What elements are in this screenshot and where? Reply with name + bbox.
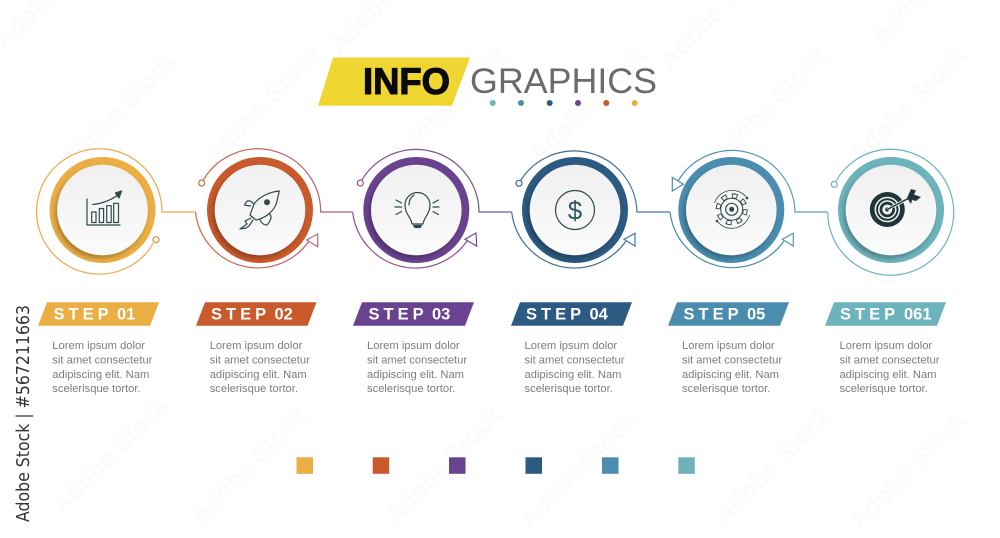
- label: step 3: 03: [432, 306, 450, 324]
- arrow: step 2: [307, 234, 318, 247]
- text block: step 6: adipiscing elit. Nam: [840, 369, 937, 381]
- step 6 label and text: [825, 302, 946, 395]
- watermark pattern: Adobe Stock: [844, 41, 972, 169]
- title word: GRAPHICS: GRAPHICS: [470, 62, 657, 101]
- line: step 4 lower arc: [512, 212, 626, 268]
- connecting lines and arcs: [37, 149, 954, 275]
- arrow: step 3: [465, 233, 477, 246]
- line: step 1 arc: [37, 149, 196, 274]
- watermark pattern: Adobe Stock: [46, 391, 174, 519]
- panel: step 2 disc: [207, 157, 313, 263]
- label: step 1: [38, 302, 159, 326]
- arrow: step 4: [624, 233, 635, 246]
- text block: step 1: scelerisque tortor.: [52, 383, 141, 395]
- text block: step 1: Lorem ipsum dolor: [52, 340, 145, 352]
- text block: step 5: adipiscing elit. Nam: [682, 369, 779, 381]
- text block: step 4: scelerisque tortor.: [524, 383, 613, 395]
- text block: step 6: Lorem ipsum dolor: [840, 340, 932, 352]
- watermark pattern: Adobe Stock: [184, 401, 312, 529]
- label: step 2: [196, 302, 316, 326]
- watermark pattern: Adobe Stock: [379, 401, 507, 529]
- step 1 label and text: [38, 302, 159, 395]
- watermark pattern: Adobe Stock: [524, 41, 652, 169]
- label: step 3: STEP: [368, 306, 428, 324]
- label: step 6: [825, 302, 946, 326]
- label: step 1: 01: [117, 306, 135, 324]
- dot: step 6: [831, 181, 837, 187]
- text block: step 4: Lorem ipsum dolor: [524, 340, 617, 352]
- text block: step 4: sit amet consectetur: [524, 354, 625, 366]
- label: step 2: 02: [274, 306, 293, 324]
- title colour dots: [490, 100, 638, 106]
- text block: step 6: sit amet consectetur: [840, 354, 940, 366]
- title banner: [318, 58, 470, 106]
- watermark pattern: Adobe Stock: [199, 41, 327, 169]
- label: step 4: 04: [590, 306, 609, 324]
- label: step 5: 05: [747, 306, 765, 324]
- text block: step 2: Lorem ipsum dolor: [210, 340, 303, 352]
- dot: step 3: [357, 180, 363, 186]
- dot: step 1: [153, 237, 159, 243]
- label: step 6: 061: [904, 306, 932, 324]
- step 2 label and text: [196, 302, 316, 395]
- icon: gear with cycle arrows: [714, 190, 750, 228]
- panel: step 3 disc: [363, 157, 469, 263]
- line: step 2 upper arc: [202, 149, 353, 212]
- text block: step 4: adipiscing elit. Nam: [524, 369, 622, 381]
- watermark pattern: Adobe Stock: [384, 41, 512, 169]
- text block: step 6: scelerisque tortor.: [840, 383, 928, 395]
- line: step 4 upper arc: [519, 151, 670, 212]
- line: step 3 upper arc: [360, 149, 512, 212]
- text block: step 5: scelerisque tortor.: [682, 383, 770, 395]
- text block: step 5: sit amet consectetur: [682, 354, 782, 366]
- panel: step 4 disc: [522, 157, 628, 263]
- step 5 label and text: [668, 302, 789, 395]
- title: [318, 58, 657, 106]
- text block: step 3: Lorem ipsum dolor: [367, 340, 460, 352]
- panel: step 5 disc: [678, 157, 784, 263]
- text block: step 5: Lorem ipsum dolor: [682, 340, 775, 352]
- watermark pattern: Adobe Stock: [514, 406, 642, 534]
- line: step 2 lower arc: [196, 212, 309, 268]
- dot: step 2: [199, 180, 205, 186]
- vertical stock credit: Adobe Stock | #567211663: [13, 305, 34, 522]
- text block: step 1: adipiscing elit. Nam: [52, 369, 149, 381]
- step 3 label and text: [353, 302, 474, 395]
- panel: step 6 disc: [838, 157, 944, 263]
- icon: growth chart: [87, 191, 122, 225]
- text block: step 1: sit amet consectetur: [52, 354, 153, 366]
- watermark pattern: Adobe Stock: [704, 41, 832, 169]
- panel: step 1 disc: [50, 157, 156, 263]
- line: step 5 upper arc: [678, 150, 828, 212]
- label: step 3: [353, 302, 474, 326]
- watermark pattern: Adobe Stock: [844, 406, 972, 534]
- icon: target with arrow: [870, 189, 921, 227]
- line: step 6 arc: [828, 149, 954, 275]
- text block: step 2: scelerisque tortor.: [210, 383, 298, 395]
- label: step 4: [511, 302, 632, 326]
- icon: rocket: [240, 191, 279, 229]
- title word: INFO: INFO: [363, 61, 450, 102]
- label: step 1: STEP: [54, 306, 113, 324]
- line: step 5 lower arc: [670, 212, 784, 268]
- text block: step 3: scelerisque tortor.: [367, 383, 455, 395]
- text block: step 3: adipiscing elit. Nam: [367, 369, 464, 381]
- arrow: step 5 upper: [672, 177, 683, 191]
- label: step 2: STEP: [211, 306, 270, 324]
- watermark pattern: Adobe Stock: [709, 401, 837, 529]
- line: step 3 lower arc: [353, 212, 467, 268]
- label: step 4: STEP: [526, 306, 585, 324]
- label: step 5: STEP: [684, 306, 743, 324]
- label: step 5: [668, 302, 789, 326]
- text block: step 2: sit amet consectetur: [210, 354, 310, 366]
- arrow: step 5 lower: [782, 233, 793, 246]
- colour legend squares: [296, 457, 695, 474]
- icon: dollar coin: $: [568, 196, 583, 226]
- icon: light bulb: [395, 192, 439, 228]
- text block: step 3: sit amet consectetur: [367, 354, 467, 366]
- text block: step 2: adipiscing elit. Nam: [210, 369, 307, 381]
- label: step 6: STEP: [840, 306, 899, 324]
- step 4 label and text: [511, 302, 632, 395]
- dot: step 4: [516, 180, 522, 186]
- watermark pattern: Adobe Stock: [54, 46, 182, 174]
